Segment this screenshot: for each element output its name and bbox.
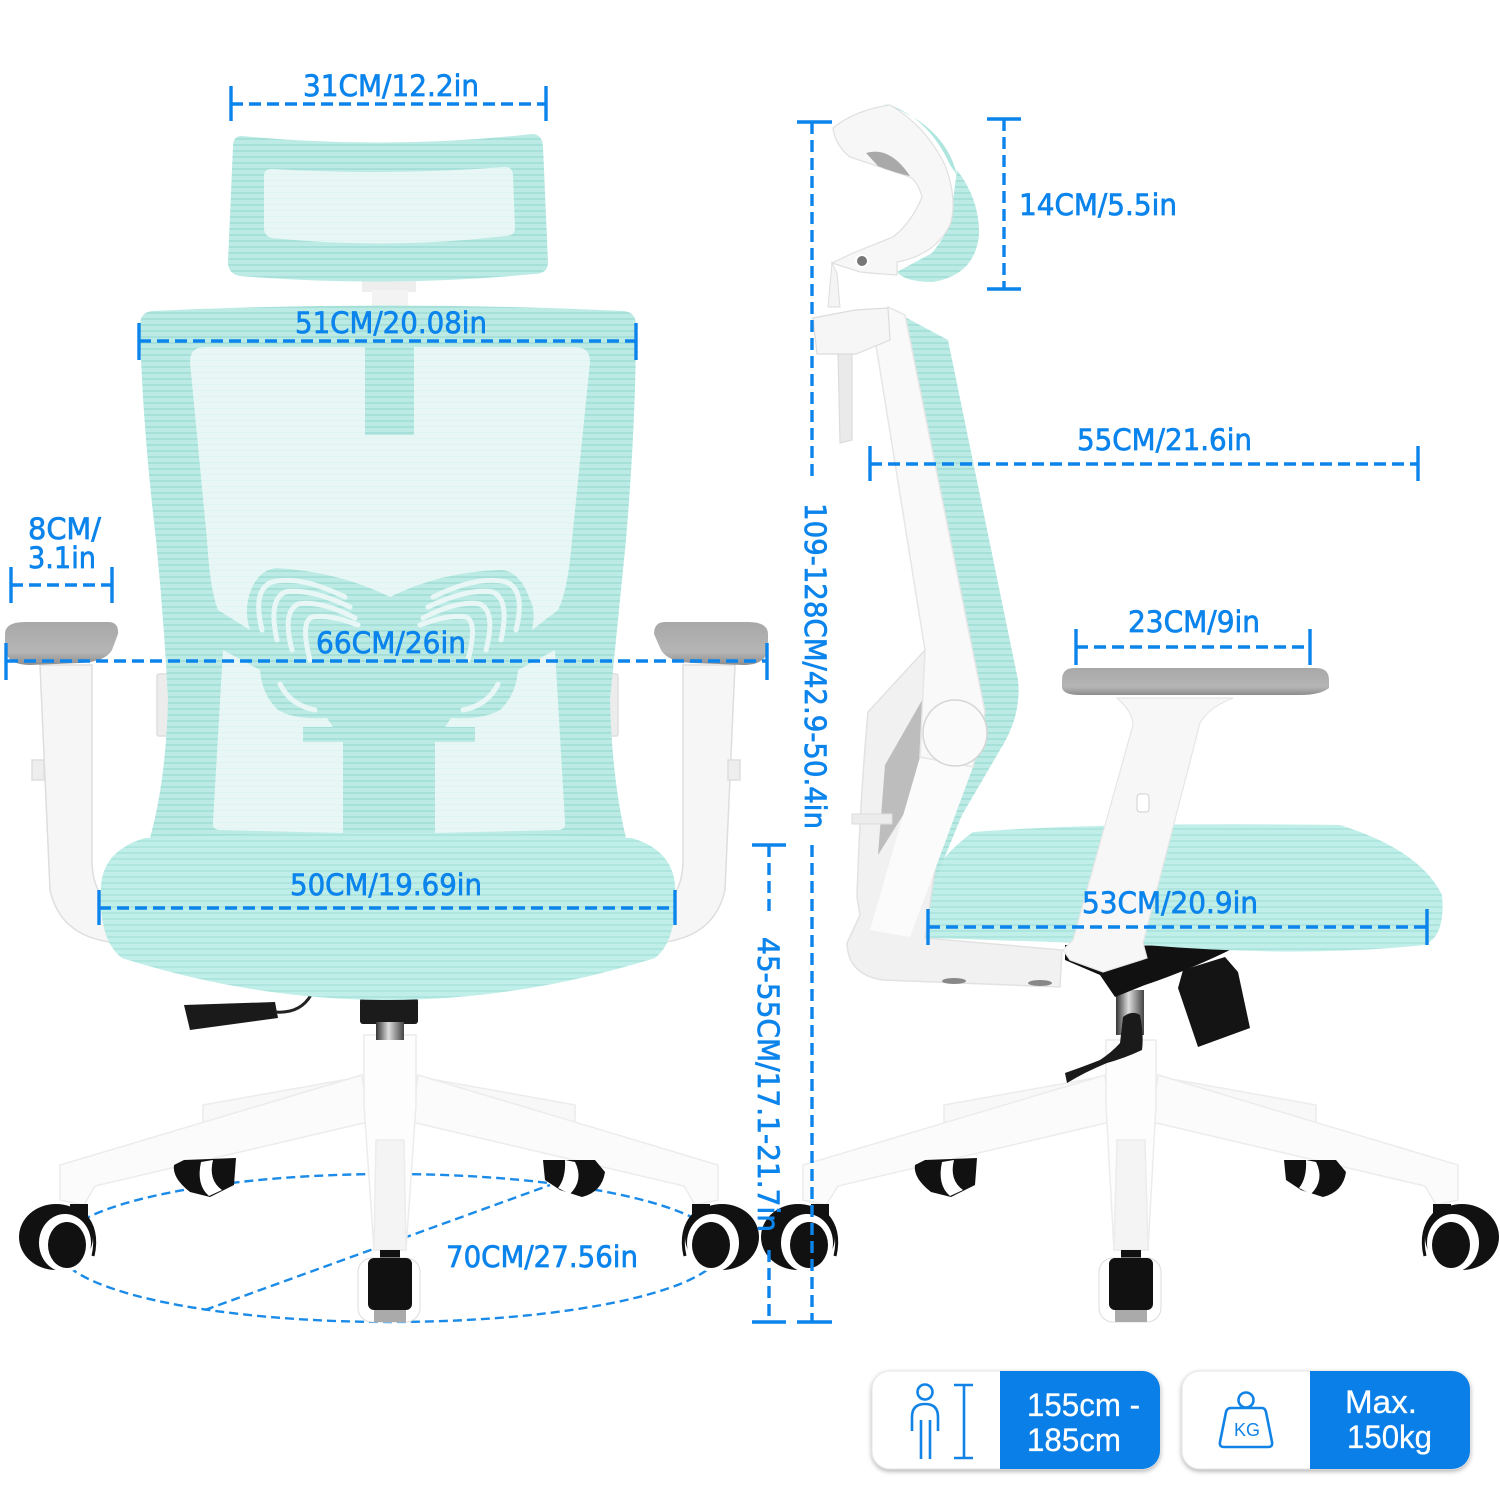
label: headrest width: 31CM/12.2in [303,69,479,103]
dimension lines [6,86,1427,1322]
front view chair [5,134,768,1322]
front base [60,1035,718,1250]
seat width line [99,890,675,925]
side armrest [1062,668,1329,972]
label: seat height: 45-55CM/17.1-21.7in [751,937,785,1232]
front gas lift and tilt lever [184,995,418,1040]
seat height line [752,845,786,1322]
icon: kilogram weight [1220,1392,1272,1447]
height range text: 155cm - [1027,1387,1140,1423]
side headrest [828,104,979,307]
lumbar lower panels [213,650,343,833]
headrest width line [231,86,546,121]
label: seat width: 50CM/19.69in [290,868,482,902]
total height line [797,122,832,1322]
icon: person with height bar [912,1384,973,1459]
front casters [19,1158,759,1322]
headrest track [365,345,414,435]
front backrest mesh [140,306,636,838]
front headrest [228,134,548,310]
height range text [1027,1387,1140,1458]
label: seat depth: 53CM/20.9in [1082,886,1258,920]
side frame [847,307,1062,987]
label: back width: 51CM/20.08in [295,306,487,340]
front armrest pads [5,622,768,665]
label: overall width: 66CM/26in [316,626,466,660]
side clamp and rod [813,308,890,443]
side backrest mesh [888,308,1019,905]
label: headrest height: 14CM/5.5in [1019,188,1177,222]
overall width line [6,643,767,680]
lumbar arcs [259,580,519,710]
badge: max weight [1182,1371,1470,1469]
icon: kilogram weight: KG [1234,1420,1260,1440]
badge: user height [872,1371,1160,1469]
seat depth line [928,909,1427,945]
height range text: 185cm [1027,1422,1121,1458]
weight limit text: Max. [1345,1384,1417,1420]
armrest width line [11,567,112,603]
weight limit text [1345,1384,1432,1455]
label: armrest width inches: 3.1in [28,541,96,575]
label: total height: 109-128CM/42.9-50.4in [798,503,832,829]
side gas lift, knob, lever [1065,945,1250,1083]
front armrest posts [32,665,740,942]
label: base diameter: 70CM/27.56in [446,1240,638,1274]
front seat cushion [101,833,675,1000]
label: depth: 55CM/21.6in [1077,423,1252,457]
dashed wheelbase ellipse [58,1174,722,1322]
side base [803,1040,1458,1250]
label: armrest length: 23CM/9in [1128,605,1260,639]
armrest length line [1076,629,1310,665]
upper light panel [190,347,590,630]
depth line [870,446,1418,481]
dimension labels [28,69,1260,1274]
weight limit text: 150kg [1347,1419,1432,1455]
back width line [139,323,636,360]
side seat cushion [908,824,1443,952]
headrest height line [987,119,1021,289]
label: armrest width: 8CM/ [28,512,101,546]
side view chair [761,104,1499,1322]
side casters [761,1158,1499,1322]
